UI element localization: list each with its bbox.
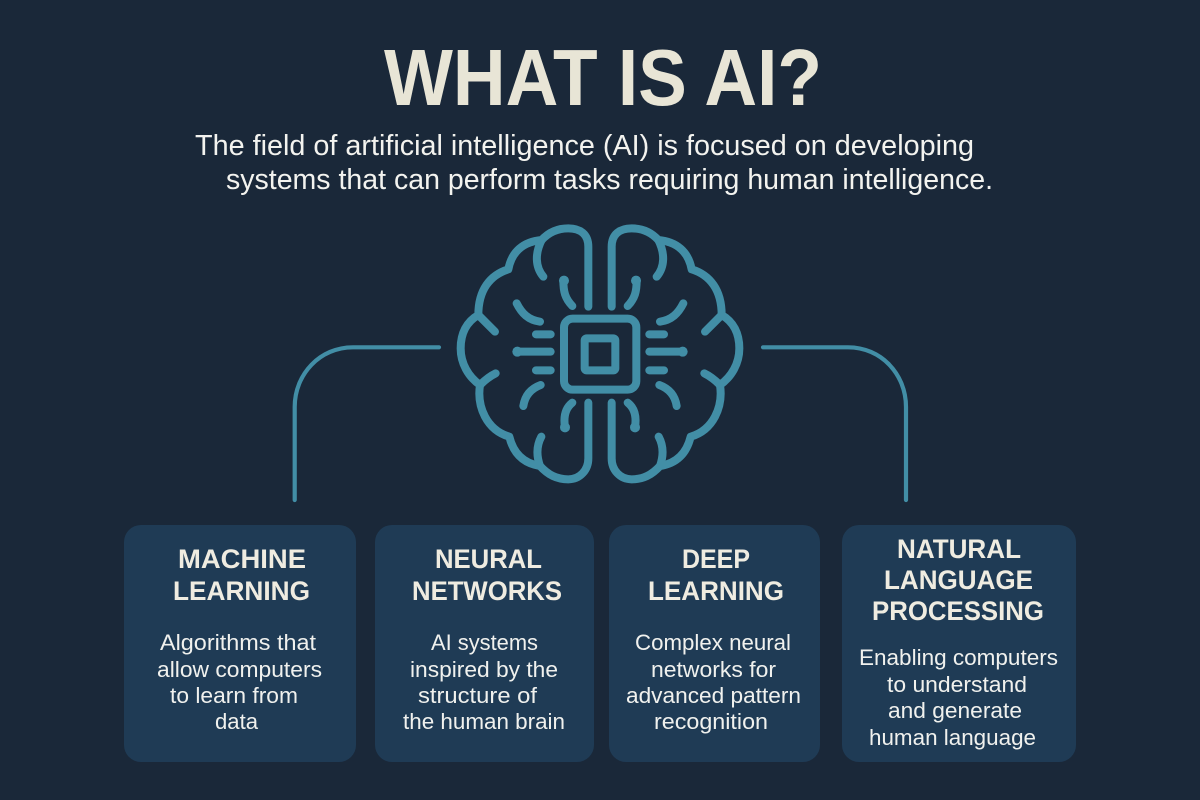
heading: neural networks: NETWORKS — [412, 576, 562, 606]
text: deep learning description: recognition — [654, 709, 768, 734]
text: neural networks description: inspired by the — [410, 657, 558, 682]
heading: deep learning: DEEP — [682, 544, 750, 574]
text: neural networks description: structure of — [418, 683, 538, 708]
subtitle: The field of artificial intelligence (AI) is focused on developing — [195, 130, 974, 162]
heading: machine learning — [173, 544, 310, 606]
right connector line — [763, 347, 906, 500]
text: machine learning description — [157, 630, 322, 734]
text: neural networks description: the human brain — [403, 709, 565, 734]
text: natural language processing description — [859, 645, 1058, 750]
subtitle: systems that can perform tasks requiring human intelligence. — [226, 164, 993, 196]
brain left hemisphere — [461, 228, 588, 479]
text: machine learning description: Algorithms that — [160, 630, 317, 655]
text: deep learning description: advanced pattern — [626, 683, 801, 708]
title: WHAT IS AI? — [384, 33, 822, 122]
heading: deep learning: LEARNING — [648, 576, 784, 606]
heading: deep learning — [648, 544, 784, 606]
panel: natural language processing — [842, 525, 1076, 762]
heading: neural networks: NEURAL — [435, 544, 542, 574]
panel: deep learning — [609, 525, 820, 762]
brain right hemisphere — [612, 228, 739, 479]
text: deep learning description: networks for — [651, 657, 777, 682]
text: natural language processing description: human language — [869, 725, 1036, 750]
text: natural language processing description: Enabling computers — [859, 645, 1058, 670]
text: machine learning description: allow computers — [157, 657, 322, 682]
text: machine learning description: data — [215, 709, 258, 734]
text: natural language processing description: to understand — [887, 672, 1027, 697]
heading: natural language processing — [872, 534, 1044, 626]
icon: brain with chip — [461, 228, 739, 479]
text: natural language processing description: and generate — [888, 698, 1022, 723]
text: deep learning description: Complex neural — [635, 630, 791, 655]
heading: natural language processing: LANGUAGE — [884, 565, 1033, 595]
text: neural networks description — [403, 630, 565, 734]
heading: natural language processing: PROCESSING — [872, 596, 1044, 626]
chip — [564, 319, 636, 390]
heading: natural language processing: NATURAL — [897, 534, 1021, 564]
text: deep learning description — [626, 630, 801, 734]
panel: machine learning — [124, 525, 356, 762]
heading: neural networks — [412, 544, 562, 606]
panel: neural networks — [375, 525, 594, 762]
heading: machine learning: MACHINE — [178, 544, 306, 574]
text: machine learning description: to learn from — [170, 683, 298, 708]
left connector line — [295, 347, 439, 500]
heading: machine learning: LEARNING — [173, 576, 310, 606]
subtitle — [195, 130, 993, 196]
text: neural networks description: AI systems — [431, 630, 538, 655]
